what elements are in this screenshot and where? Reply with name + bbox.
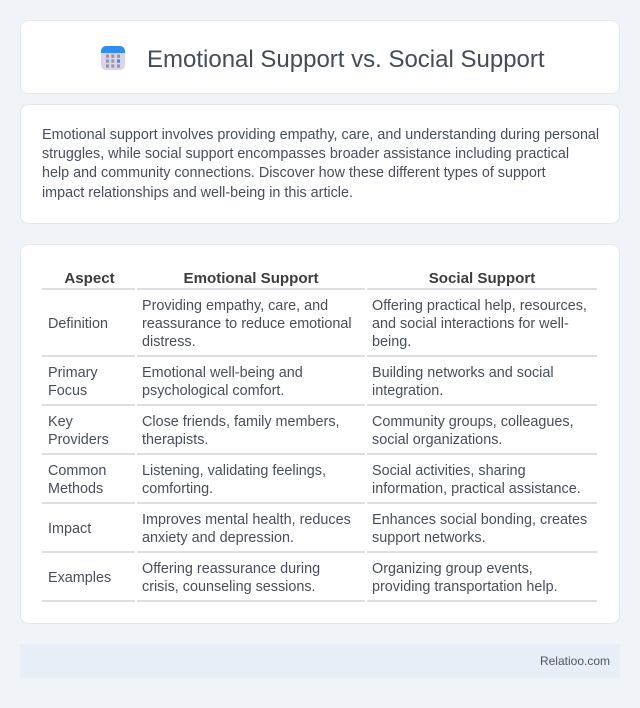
row: Key Providers: Key — [48, 414, 73, 430]
row: Impact — [48, 512, 587, 546]
row: Impact: Enhances social bonding, creates — [372, 512, 587, 528]
text block: introduction: Emotional support involves providing empathy, care, and understanding during personal — [42, 127, 599, 143]
row: Definition: Providing empathy, care, and — [142, 298, 328, 314]
row: Definition: reassurance to reduce emotional — [142, 316, 352, 332]
row: Examples — [48, 561, 558, 595]
row: Definition: and social interactions for well- — [372, 316, 569, 332]
row: Primary Focus — [48, 365, 554, 399]
row: Definition: Definition — [48, 316, 108, 332]
text block: introduction: help and community connections. Discover how these different types of support — [42, 165, 546, 181]
row: Examples: providing transportation help. — [372, 579, 558, 595]
row: Key Providers: Providers — [48, 432, 109, 448]
row: Primary Focus: integration. — [372, 383, 443, 399]
footer credit: Relatioo.com — [540, 654, 610, 668]
row: Impact: Impact — [48, 521, 91, 537]
row: Common Methods: Listening, validating feelings, — [142, 463, 326, 479]
row: Common Methods: Common — [48, 463, 106, 479]
row: Examples: crisis, counseling sessions. — [142, 579, 316, 595]
text block: introduction: struggles, while social support encompasses broader assistance including practical — [42, 146, 569, 162]
row: Definition: being. — [372, 334, 411, 350]
row: Definition: distress. — [142, 334, 196, 350]
row: Primary Focus: Focus — [48, 383, 87, 399]
row: Common Methods: comforting. — [142, 481, 213, 497]
icon: calendar — [101, 46, 125, 70]
row: Primary Focus: psychological comfort. — [142, 383, 284, 399]
row: Examples: Organizing group events, — [372, 561, 533, 577]
row: Key Providers: Community groups, colleagues, — [372, 414, 574, 430]
row: Common Methods: Methods — [48, 481, 103, 497]
row: Impact: support networks. — [372, 530, 486, 546]
title: Emotional Support vs. Social Support — [147, 46, 545, 73]
row: Common Methods: information, practical assistance. — [372, 481, 581, 497]
row: Definition: Offering practical help, resources, — [372, 298, 587, 314]
panel: introduction — [20, 104, 620, 224]
row: Impact: Improves mental health, reduces — [142, 512, 351, 528]
text block: introduction — [42, 127, 599, 201]
row: Examples: Offering reassurance during — [142, 561, 320, 577]
text block: introduction: impact relationships and well-being in this article. — [42, 185, 353, 201]
table header row: Social Support — [429, 270, 535, 287]
row: Primary Focus: Building networks and social — [372, 365, 554, 381]
table header row: Emotional Support — [184, 270, 318, 287]
row: Key Providers — [48, 414, 574, 448]
panel: title header — [20, 20, 620, 94]
row: Key Providers: therapists. — [142, 432, 208, 448]
row: Common Methods — [48, 463, 581, 497]
row: Impact: anxiety and depression. — [142, 530, 294, 546]
row: Key Providers: social organizations. — [372, 432, 502, 448]
row: Examples: Examples — [48, 570, 111, 586]
panel: comparison table — [20, 244, 620, 624]
table header row — [64, 270, 536, 287]
row: Definition — [48, 298, 587, 350]
comparison table — [42, 270, 597, 602]
row: Primary Focus: Emotional well-being and — [142, 365, 303, 381]
table header row: Aspect — [64, 270, 115, 287]
footer bar — [20, 644, 620, 678]
row: Key Providers: Close friends, family members, — [142, 414, 340, 430]
row: Primary Focus: Primary — [48, 365, 98, 381]
row: Common Methods: Social activities, sharing — [372, 463, 526, 479]
